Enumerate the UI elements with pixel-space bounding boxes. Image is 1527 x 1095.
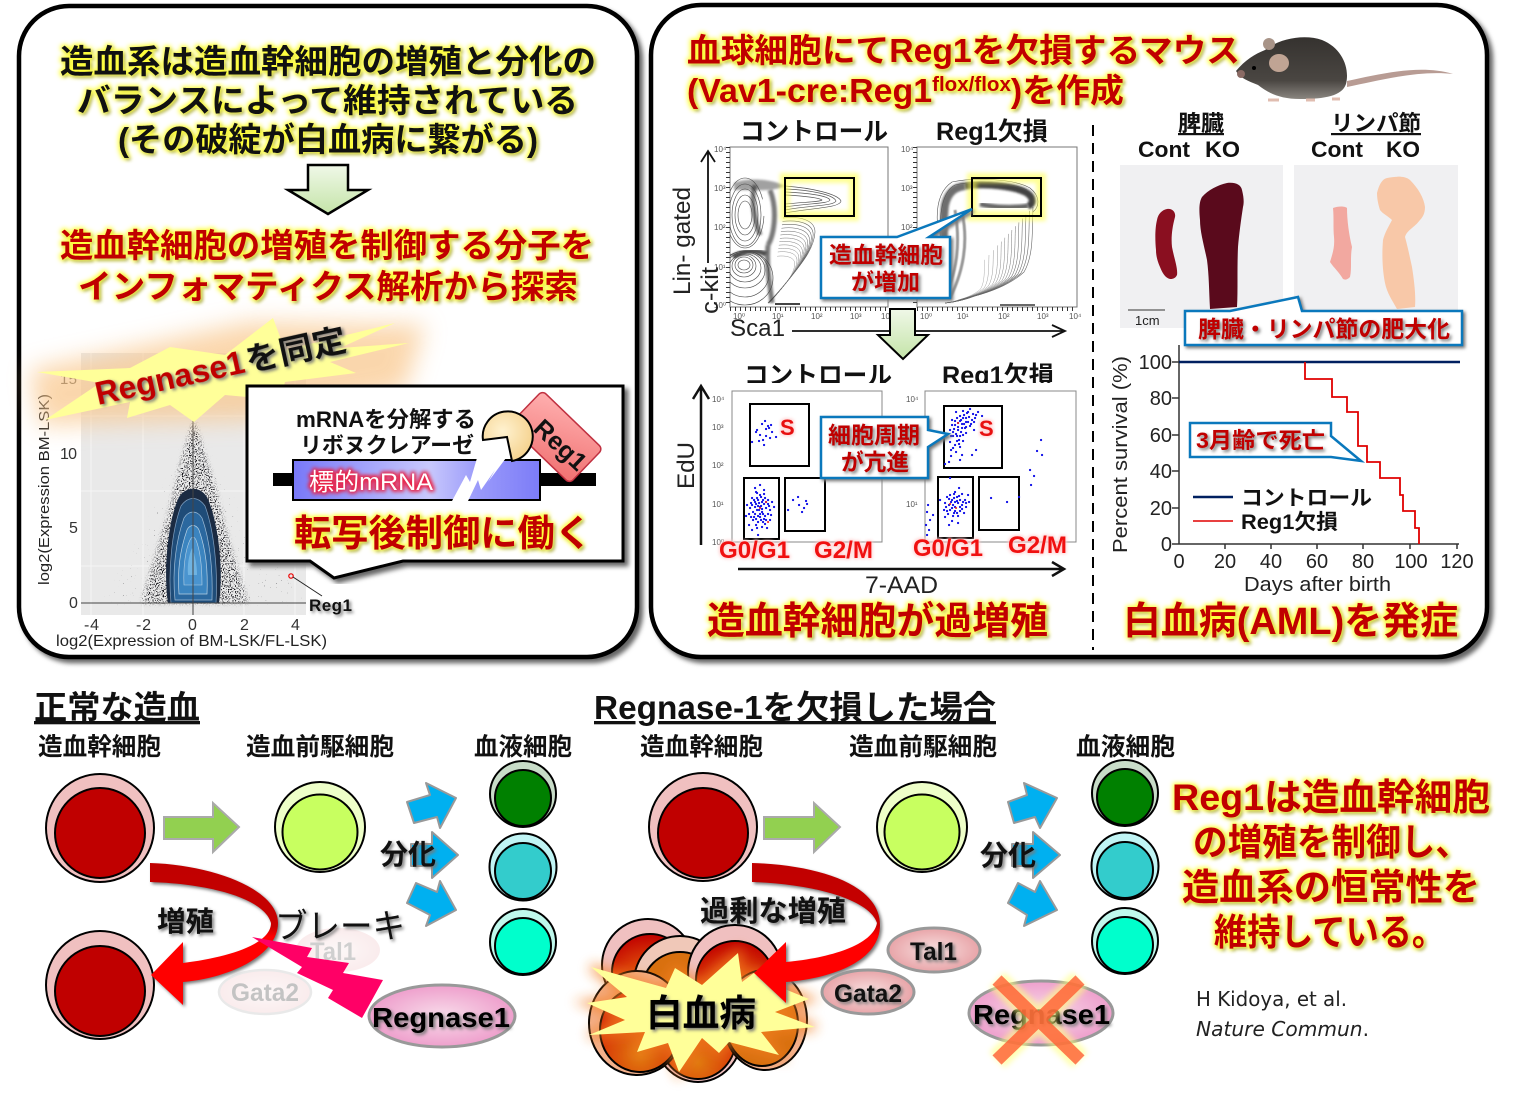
- callout: death at 3 months: [1190, 423, 1361, 461]
- chart: cell cycle knockout: [906, 391, 1076, 542]
- tick labels: 10³: [901, 184, 913, 193]
- x axis title: Days after birth: [1244, 574, 1391, 596]
- chart: contour plot control: [714, 145, 894, 321]
- titles: organs: KO: [1205, 137, 1240, 162]
- citation: H Kidoya, et al.: [1196, 987, 1347, 1011]
- titles: organs: KO: [1386, 137, 1420, 162]
- tick labels: 10⁰: [714, 301, 726, 310]
- photo: lymph node: [1294, 165, 1458, 328]
- tick labels: -4: [84, 617, 99, 634]
- heading: informatics search: 造血幹細胞の増殖を制御する分子を: [60, 227, 594, 264]
- arrow: excess proliferation curve: [752, 863, 880, 1003]
- labels: cell types: 造血前駆細胞: [849, 733, 997, 761]
- titles: flow cytometry top: Reg1欠損: [936, 118, 1048, 146]
- labels: cell types: [38, 733, 572, 761]
- marker: Reg1: Reg1: [309, 596, 352, 615]
- axis: 7-AAD: [738, 562, 1064, 599]
- factor: Gata2: Gata2: [834, 980, 902, 1008]
- heading: informatics search: インフォマティクス解析から探索: [78, 268, 578, 305]
- cluster: leukemia cells: [587, 919, 815, 1082]
- tick labels: 10⁰: [733, 312, 745, 321]
- chart: survival curve: [1110, 345, 1474, 596]
- labels: cell cycle phases: [719, 532, 1067, 564]
- heading: AML: 白血病(AML)を発症: [1123, 601, 1458, 643]
- citation: [1196, 987, 1369, 1041]
- titles: organs: Cont: [1138, 137, 1191, 162]
- y ticks: 20: [1150, 498, 1172, 520]
- chart: cell cycle control: 10¹: [712, 500, 724, 509]
- text: differentiation: 分化: [380, 839, 436, 870]
- y ticks: 80: [1150, 388, 1172, 410]
- conclusion text: 造血系の恒常性を: [1182, 867, 1480, 908]
- titles: organs: 脾臓: [1178, 111, 1224, 136]
- callout: stem cells increase: が増加: [851, 269, 920, 295]
- icon: mRNA strand: 標的mRNA: [309, 469, 433, 496]
- icon: inhibition lightning: [252, 937, 383, 1018]
- tick labels: 10¹: [714, 263, 726, 272]
- text: excess proliferation: 過剰な増殖: [700, 895, 846, 928]
- arrows: differentiation: [1008, 783, 1060, 926]
- burst: Regnase1 identified: を同定: [242, 321, 349, 379]
- legend: コントロール: [1241, 487, 1372, 510]
- heading: normal: 正常な造血: [34, 689, 200, 726]
- chart: cell cycle knockout: 10²: [906, 461, 918, 470]
- tick labels: 10²: [714, 223, 726, 232]
- x axis label: log2(Expression of BM-LSK/FL-LSK): [56, 633, 327, 650]
- factor: Regnase1 knocked out: [969, 980, 1113, 1060]
- x ticks: 120: [1440, 551, 1474, 573]
- heading: Vav1-cre mouse: [687, 32, 1240, 109]
- x ticks: 20: [1214, 551, 1236, 573]
- photo: spleen: 1cm: [1135, 313, 1160, 328]
- callout: enlarged organs: 脾臓・リンパ節の肥大化: [1198, 316, 1450, 342]
- arrow: to progenitor: [764, 803, 840, 852]
- callout: stem cells increase: 造血幹細胞: [829, 243, 943, 268]
- factor: Regnase1: Regnase1: [372, 1002, 510, 1033]
- y ticks: 40: [1150, 461, 1172, 483]
- tick labels: 10¹: [957, 312, 969, 321]
- arrow: proliferation curve: [150, 863, 278, 1005]
- conclusion text: の増殖を制御し、: [1193, 822, 1470, 863]
- factor: Gata2: [822, 970, 914, 1014]
- tick labels: 10⁰: [920, 312, 932, 321]
- labels: cell cycle phases: G2/M: [814, 537, 873, 564]
- tick labels: 4: [291, 617, 300, 634]
- chart: contour plot knockout: [901, 145, 1082, 321]
- heading: hematopoiesis balance: [60, 43, 596, 158]
- tick labels: 2: [240, 617, 249, 634]
- heading: Vav1-cre mouse: )を作成: [1011, 72, 1124, 109]
- legend: [1193, 487, 1372, 534]
- x ticks: 100: [1394, 551, 1428, 573]
- labels: cell cycle phases: G0/G1: [719, 537, 790, 564]
- axis: 7-AAD: 7-AAD: [865, 572, 938, 599]
- callout: enlarged organs: [1185, 297, 1462, 345]
- cell: stem: [46, 774, 154, 882]
- x ticks: 80: [1352, 551, 1374, 573]
- tick labels: 10⁴: [714, 145, 727, 154]
- text: proliferation: 増殖: [157, 906, 214, 937]
- chart: cell cycle control: [712, 391, 882, 547]
- cell: progenitor: [275, 782, 365, 872]
- text: ribonuclease: リボヌクレアーゼ: [300, 433, 474, 458]
- heading: stem cell overgrowth: 造血幹細胞が過増殖: [707, 601, 1048, 643]
- axis: Sca1: Sca1: [730, 315, 785, 342]
- callout: post-transcriptional control: [247, 386, 623, 578]
- y axis label: log2(Expression BM-LSK): [37, 394, 53, 585]
- tick labels: 10⁴: [901, 145, 914, 154]
- titles: cell cycle: コントロール: [744, 362, 892, 390]
- text: works post-transcriptionally: 転写後制御に働く: [294, 513, 592, 554]
- conclusion text: Reg1は造血幹細胞: [1172, 777, 1490, 818]
- text: ribonuclease: mRNAを分解する: [296, 407, 476, 432]
- tick labels: 10⁴: [1069, 312, 1082, 321]
- icon: Reg1 tag: [509, 391, 603, 483]
- x ticks: [1173, 551, 1474, 573]
- cells: blood: [490, 761, 556, 975]
- chart: cell cycle control: 10³: [712, 423, 724, 432]
- labels: cell types: 血液細胞: [1076, 733, 1175, 761]
- factors faded: Tal1: [310, 938, 356, 966]
- icon: nuclease pacman: [483, 411, 533, 461]
- titles: organs: リンパ節: [1331, 111, 1421, 136]
- panel: knockout mouse: [651, 5, 1487, 657]
- labels: cell types: 造血前駆細胞: [246, 733, 394, 761]
- axis: Sca1: [730, 315, 1065, 342]
- axis: c-kit: Lin- gated: [669, 187, 696, 295]
- y ticks: 60: [1150, 425, 1172, 447]
- citation: Nature Commun.: [1196, 1017, 1369, 1041]
- cell: progenitor: [877, 782, 967, 872]
- arrow: down green middle: [878, 309, 928, 359]
- axis: EdU: EdU: [673, 442, 700, 489]
- panel: normal hematopoiesis: [34, 689, 572, 1047]
- icon: cross: [997, 980, 1080, 1060]
- cells: blood: [1092, 760, 1158, 974]
- tick labels: 0: [188, 617, 197, 634]
- y axis title: Percent survival (%): [1110, 356, 1132, 553]
- burst: Regnase1 identified: Regnase1: [92, 344, 248, 412]
- heading: hematopoiesis balance: (その破綻が白血病に繋がる): [118, 121, 538, 158]
- heading: hematopoiesis balance: 造血系は造血幹細胞の増殖と分化の: [60, 43, 596, 80]
- chart: cell cycle control: 10⁴: [712, 395, 725, 404]
- heading: informatics search: [60, 227, 594, 305]
- labels: cell cycle phases: G2/M: [1008, 532, 1067, 559]
- heading: Vav1-cre mouse: 血球細胞にてReg1を欠損するマウス: [687, 32, 1240, 69]
- arrows: differentiation: [407, 783, 458, 926]
- burst: Regnase1 identified: [30, 318, 425, 425]
- conclusion text: 維持している。: [1214, 912, 1445, 953]
- axis: c-kit: c-kit: [697, 267, 724, 314]
- chart: cell cycle control: 10⁰: [712, 538, 724, 547]
- y ticks: [1139, 352, 1172, 556]
- tick labels: 10²: [811, 312, 823, 321]
- chart: cell cycle knockout: 10⁴: [906, 395, 919, 404]
- heading: Vav1-cre mouse: flox/flox: [932, 74, 1011, 96]
- burst: leukemia: 白血病: [646, 993, 756, 1034]
- callout: cell cycle: が亢進: [841, 449, 909, 475]
- labels: cell types: [640, 733, 1175, 761]
- y ticks: 100: [1139, 352, 1172, 374]
- axis: c-kit: [669, 151, 724, 314]
- tick labels: 15: [60, 371, 77, 388]
- chart: cell cycle control: 10²: [712, 461, 724, 470]
- heading: deficient: Regnase-1を欠損した場合: [594, 689, 996, 726]
- tick labels: 10²: [998, 312, 1010, 321]
- chart: cell cycle knockout: S: [979, 416, 994, 441]
- legend: Reg1欠損: [1241, 510, 1338, 534]
- tick labels: 10²: [901, 223, 913, 232]
- titles: organs: Cont: [1311, 137, 1364, 162]
- tick labels: 10³: [850, 312, 862, 321]
- factor: Tal1: Tal1: [910, 938, 957, 966]
- panel: Regnase-1 deficient: [587, 689, 1175, 1082]
- tick labels: 0: [69, 595, 78, 612]
- tick labels: [60, 371, 300, 634]
- tick labels: [901, 145, 1082, 321]
- titles: cell cycle: Reg1欠損: [942, 362, 1054, 390]
- x ticks: 40: [1260, 551, 1282, 573]
- tick labels: 10: [60, 446, 77, 463]
- y ticks: 0: [1161, 534, 1172, 556]
- cell: stem: [649, 773, 757, 881]
- titles: flow cytometry top: コントロール: [740, 118, 888, 146]
- arrow: down green: [288, 165, 368, 214]
- text: differentiation: 分化: [980, 840, 1036, 871]
- x ticks: 60: [1306, 551, 1328, 573]
- factor: Regnase1: [369, 985, 515, 1047]
- labels: cell types: 血液細胞: [474, 733, 572, 761]
- icon: mouse: [1236, 37, 1453, 100]
- tick labels: 10¹: [772, 312, 784, 321]
- callout: cell cycle: [821, 417, 948, 478]
- tick labels: -2: [136, 617, 151, 634]
- titles: flow cytometry top: [740, 118, 1048, 146]
- callout: cell cycle: 細胞周期: [828, 422, 920, 448]
- chart: cell cycle knockout: 10¹: [906, 500, 918, 509]
- tick labels: 10³: [714, 184, 726, 193]
- panel: informatics screening: [19, 6, 637, 657]
- arrow: to progenitor: [164, 803, 239, 852]
- factor: Regnase1 knocked out: Regnase1: [973, 999, 1110, 1030]
- labels: cell types: 造血幹細胞: [38, 733, 161, 761]
- factors faded: Gata2: [231, 979, 299, 1007]
- x ticks: 0: [1173, 551, 1185, 573]
- text: brake: ブレーキ: [275, 908, 405, 946]
- factors faded: [219, 928, 380, 1014]
- marker: Reg1: [289, 574, 352, 615]
- callout: death at 3 months: 3月齢で死亡: [1196, 428, 1325, 453]
- tick labels: 10⁴: [881, 312, 894, 321]
- heading: Vav1-cre mouse: (Vav1-cre:Reg1: [687, 72, 925, 109]
- chart: volcano density scatter plot: [37, 353, 352, 650]
- icon: Reg1 tag: Reg1: [528, 414, 592, 477]
- tick labels: 10³: [1037, 312, 1049, 321]
- highlighted gates: [785, 178, 1041, 216]
- labels: cell cycle phases: G0/G1: [913, 535, 983, 562]
- titles: cell cycle: [744, 362, 1054, 390]
- callout: stem cells increase: [821, 209, 972, 298]
- chart: cell cycle control: S: [780, 415, 795, 440]
- heading: hematopoiesis balance: バランスによって維持されている: [77, 82, 578, 119]
- burst: leukemia: [587, 953, 815, 1072]
- axis: EdU: [673, 386, 709, 545]
- factor: Tal1: [888, 928, 980, 972]
- cell: daughter stem: [46, 931, 154, 1039]
- text: ribonuclease: [296, 407, 476, 458]
- photo: spleen: [1120, 165, 1283, 328]
- tick labels: [714, 145, 894, 321]
- labels: cell types: 造血幹細胞: [640, 733, 763, 761]
- conclusion text: [1172, 777, 1490, 953]
- tick labels: 5: [69, 520, 78, 537]
- icon: mRNA strand: [273, 458, 596, 501]
- titles: organs: [1138, 111, 1421, 162]
